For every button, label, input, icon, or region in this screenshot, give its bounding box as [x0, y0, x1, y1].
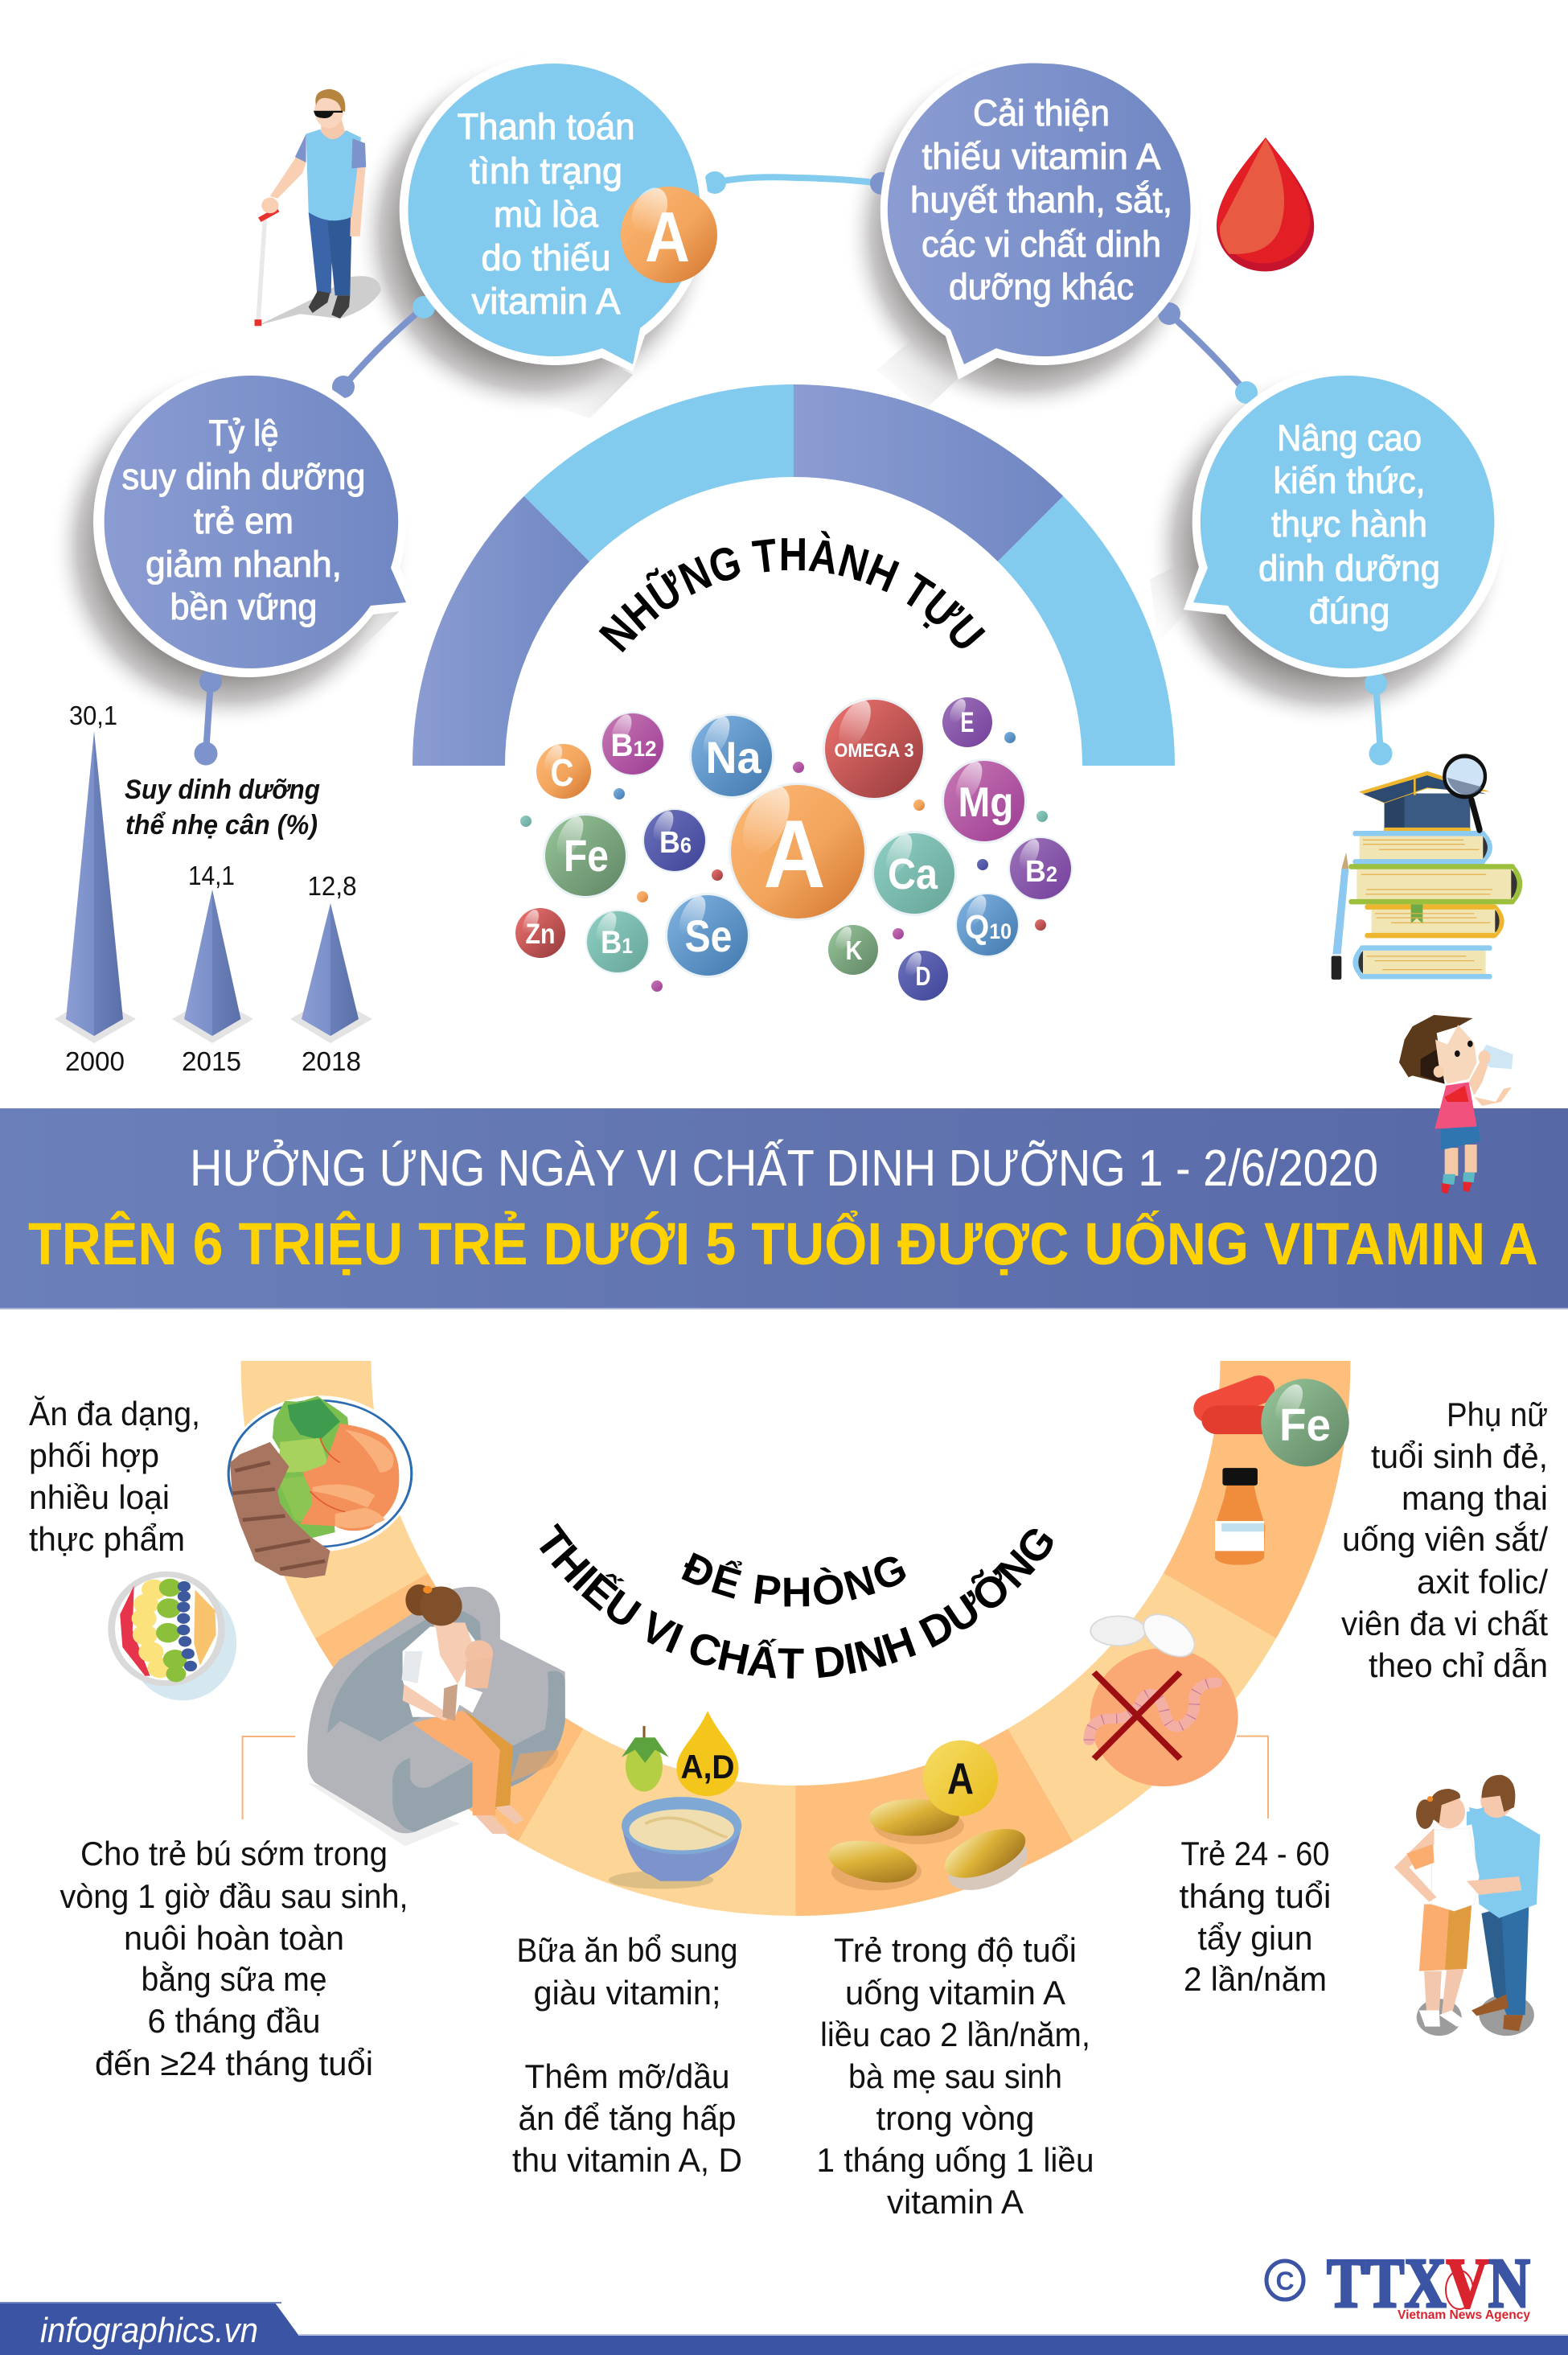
chart values: 12,8	[307, 871, 357, 901]
banner	[0, 1108, 1568, 1309]
chart title: thể nhẹ cân (%)	[125, 810, 318, 840]
text: high-dose vitamin A	[817, 1931, 1094, 2221]
ball: Zn	[515, 907, 565, 958]
bubble text: Cải thiện	[973, 92, 1110, 134]
ball: Q10: Q10	[965, 908, 1012, 946]
ball: B12: B12	[611, 728, 656, 763]
text: complementary meals: giàu vitamin;	[534, 1974, 720, 2012]
text: high-dose vitamin A: 1 tháng uống 1 liều	[817, 2141, 1094, 2179]
text: early breastfeeding: nuôi hoàn toàn	[124, 1919, 344, 1957]
heading: những thành tựu: NHỮNG THÀNH TỰU	[598, 531, 986, 653]
icon: oil drop, fruit and porridge bowl	[609, 1711, 741, 1889]
panel: bubble raise nutrition knowledge	[1184, 367, 1505, 677]
text: deworming: 2 lần/năm	[1184, 1960, 1327, 1998]
text: women of childbearing age: Phụ nữ	[1447, 1395, 1548, 1433]
icon: blood drop	[1217, 138, 1314, 272]
label: A,D: A,D	[680, 1748, 735, 1786]
icon: boy drinking water	[1399, 1015, 1513, 1194]
ball: B1	[587, 910, 648, 972]
panel: bubble improve vitamin A deficiency	[880, 55, 1199, 380]
text: high-dose vitamin A: bà mẹ sau sinh	[848, 2057, 1062, 2095]
text: early breastfeeding	[60, 1835, 408, 2082]
icon: vitamin A ball: A	[645, 197, 690, 277]
chart values: 30,1	[69, 701, 117, 730]
footer bar	[0, 2303, 1568, 2355]
text: high-dose vitamin A: vitamin A	[887, 2183, 1024, 2221]
text: deworming: tẩy giun	[1198, 1919, 1312, 1957]
bubble text: kiến thức,	[1274, 460, 1425, 501]
text: early breastfeeding: Cho trẻ bú sớm trong	[80, 1835, 388, 1872]
ball: E	[942, 697, 992, 747]
bubble text	[457, 106, 635, 322]
ball: Na	[692, 713, 772, 796]
text: varied diet: Ăn đa dạng,	[29, 1395, 200, 1432]
text: women of childbearing age: viên đa vi chất	[1341, 1605, 1548, 1642]
text: women of childbearing age: uống viên sắt/	[1342, 1520, 1548, 1558]
ball: Ca	[874, 830, 954, 914]
ball: Omega 3: OMEGA 3	[835, 740, 913, 762]
bubble text: các vi chất dinh	[922, 224, 1161, 265]
ball: B2: B2	[1025, 855, 1057, 889]
ball: Na: Na	[706, 732, 761, 783]
icon: deworming circle with crossed worm and pills	[1089, 1606, 1238, 1786]
ball: Zn: Zn	[526, 919, 555, 950]
bubble text: mù lòa	[494, 194, 599, 235]
logo: TTXVN: TTXVN	[1327, 2245, 1530, 2323]
text: women of childbearing age: axit folic/	[1417, 1563, 1548, 1601]
icon: books, graduation cap, magnifier and pencil	[1332, 756, 1522, 980]
ball: K: K	[846, 935, 863, 965]
prevention half ring	[240, 1361, 1350, 1916]
ball: Omega 3	[825, 695, 923, 798]
bubble text: dưỡng khác	[949, 266, 1134, 307]
logo: TTXVN: Vietnam News Agency	[1398, 2308, 1530, 2322]
text: early breastfeeding: vòng 1 giờ đầu sau sinh,	[60, 1877, 408, 1915]
text: women of childbearing age: mang thai	[1402, 1479, 1548, 1517]
icon: blind man with cane	[255, 89, 381, 326]
ball: Fe	[545, 812, 626, 896]
bubble text: do thiếu	[481, 237, 611, 278]
ball: E: E	[960, 707, 975, 738]
chart values: 14,1	[188, 861, 235, 890]
achievements semicircular arc	[413, 384, 1175, 766]
label: A: A	[947, 1753, 974, 1803]
connector lines between bubbles	[195, 171, 1393, 766]
text: complementary meals: Bữa ăn bổ sung	[516, 1931, 738, 1969]
vitamin and mineral ball cluster	[515, 695, 1073, 1001]
bubble text	[1258, 417, 1440, 631]
bubble text: Thanh toán	[457, 106, 635, 147]
banner subtitle: HƯỞNG ỨNG NGÀY VI CHẤT DINH DƯỠNG 1 - 2/6/2020	[190, 1138, 1378, 1197]
callout bracket lines	[243, 1736, 1268, 1819]
bubble text: bền vững	[170, 586, 317, 627]
text: women of childbearing age: tuổi sinh đẻ,	[1371, 1437, 1548, 1475]
text: early breastfeeding: bằng sữa mẹ	[142, 1960, 326, 1998]
chart values	[69, 701, 357, 901]
bubble text: Nâng cao	[1277, 417, 1422, 458]
text: early breastfeeding: đến ≥24 tháng tuổi	[95, 2045, 373, 2082]
text: high-dose vitamin A: uống vitamin A	[845, 1974, 1065, 2012]
bubble text	[122, 413, 365, 627]
text: early breastfeeding: 6 tháng đầu	[148, 2002, 320, 2040]
shadows behind speech bubbles	[50, 53, 1510, 729]
ball: Ca: Ca	[888, 850, 938, 898]
bubble text: thiếu vitamin A	[922, 136, 1161, 177]
text: varied diet: nhiều loại	[29, 1478, 170, 1516]
heading: để phòng: ĐỂ PHÒNG	[682, 1552, 906, 1607]
chart years	[65, 1046, 361, 1076]
text: women of childbearing age	[1341, 1395, 1548, 1684]
ball: Se: Se	[685, 910, 732, 961]
text: deworming	[1179, 1835, 1332, 1998]
bubble text: trẻ em	[194, 500, 293, 541]
text: high-dose vitamin A: trong vòng	[876, 2099, 1034, 2137]
bubble text: tình trạng	[470, 150, 622, 191]
bubble text: dinh dưỡng	[1258, 548, 1440, 589]
chart: underweight malnutrition pyramids	[55, 701, 372, 1076]
icon: mother breastfeeding on sofa	[307, 1584, 565, 1846]
ball: Fe: Fe	[564, 830, 609, 881]
text: complementary meals: Thêm mỡ/dầu	[524, 2057, 730, 2095]
chart years: 2000	[65, 1046, 125, 1076]
ball: B1: B1	[601, 925, 633, 960]
ball: A	[731, 779, 864, 919]
text: varied diet: thực phẩm	[29, 1520, 185, 1558]
chart years: 2015	[182, 1046, 241, 1076]
ball: B6: B6	[659, 826, 692, 860]
bubble text: Tỷ lệ	[209, 413, 278, 454]
text: complementary meals: ăn để tăng hấp	[518, 2099, 737, 2137]
chart years: 2018	[302, 1046, 361, 1076]
logo: TTXVN: C	[1275, 2267, 1295, 2295]
ball: Mg	[944, 758, 1024, 841]
heading: thiếu vi chất dinh dưỡng: THIẾU VI CHẤT DINH DƯỠNG	[540, 1523, 1053, 1679]
ball: C: C	[550, 752, 574, 795]
panel: bubble eliminate blindness	[400, 55, 717, 372]
text: varied diet: phối hợp	[29, 1436, 159, 1474]
bubble text: thực hành	[1271, 503, 1427, 545]
footer website: infographics.vn	[40, 2311, 258, 2350]
panel: bubble child malnutrition	[93, 367, 415, 677]
chart title: Suy dinh dưỡng	[125, 775, 320, 805]
bubble text: đúng	[1309, 590, 1389, 631]
bubble text: giảm nhanh,	[146, 544, 342, 585]
ball: K	[828, 924, 878, 975]
icon: iron capsules, Fe ball and bottle	[1188, 1371, 1349, 1565]
bubble text: suy dinh dưỡng	[122, 456, 365, 497]
ball: Se	[667, 892, 748, 976]
text: women of childbearing age: theo chỉ dẫn	[1369, 1646, 1548, 1684]
bubble text	[910, 92, 1172, 307]
ball: C	[536, 742, 591, 799]
ball: Q10	[957, 893, 1018, 956]
label: Fe: Fe	[1279, 1399, 1331, 1451]
icon: vitamin A ball	[621, 182, 717, 283]
ball: D: D	[915, 961, 931, 991]
ball: A: A	[764, 800, 825, 908]
ball: D	[898, 950, 948, 1001]
small dots	[520, 732, 1048, 992]
ball: B12	[602, 712, 663, 775]
ball: B2	[1010, 836, 1071, 899]
text: deworming: tháng tuổi	[1179, 1877, 1332, 1915]
text: high-dose vitamin A: liều cao 2 lần/năm,	[820, 2016, 1090, 2053]
icon: couple, pregnant woman	[1394, 1775, 1540, 2036]
ball: B6	[644, 808, 705, 871]
text: complementary meals	[512, 1931, 742, 2179]
text: high-dose vitamin A: Trẻ trong độ tuổi	[834, 1931, 1077, 1969]
text: complementary meals: thu vitamin A, D	[512, 2141, 742, 2179]
ball: Mg: Mg	[958, 779, 1013, 826]
bubble text: vitamin A	[471, 281, 621, 322]
icon: vitamin A softgels	[824, 1741, 1036, 1901]
text: deworming: Trẻ 24 - 60	[1180, 1835, 1330, 1872]
icon: plate of shrimp, lettuce and meat	[226, 1395, 414, 1578]
chart title	[125, 775, 320, 840]
text: varied diet	[29, 1395, 200, 1558]
icon: fruit bowl	[108, 1572, 236, 1700]
bubble text: huyết thanh, sắt,	[910, 179, 1172, 220]
